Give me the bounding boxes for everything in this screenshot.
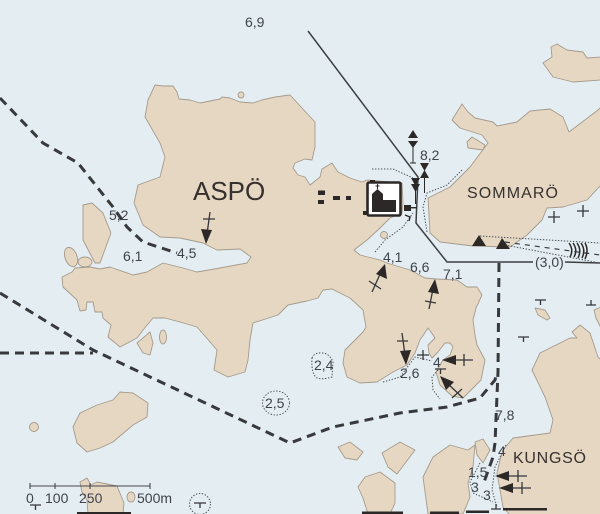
solid line east (565, 262, 600, 263)
north-south route (483, 263, 499, 485)
depth: 8,2 (420, 147, 440, 163)
rock (30, 505, 41, 510)
shoal with rock (190, 494, 210, 514)
icon: hourglass mark (420, 163, 429, 193)
scale labels: 100 (45, 490, 69, 506)
house (370, 180, 375, 182)
rock (548, 211, 560, 223)
rock (577, 205, 589, 217)
label: Aspö: ASPÖ (193, 176, 265, 206)
arrow: southeast (440, 376, 463, 398)
arrow: Aspö bay (201, 212, 215, 244)
icon: front range mark (408, 130, 418, 164)
island: Sommarö (428, 104, 600, 247)
depth: 2,5 (265, 395, 285, 411)
depth: 6,6 (410, 259, 430, 275)
islet north of Aspö (238, 92, 244, 98)
island west of Kungsö strait (423, 445, 475, 514)
solid leading line (308, 31, 533, 262)
bar (466, 510, 489, 513)
rock (417, 350, 429, 360)
icon: triangular beacons (472, 235, 510, 249)
island: Aspö (62, 85, 485, 398)
depth: 4,1 (383, 249, 403, 265)
depth: 2,4 (314, 357, 334, 373)
depth: 7,1 (443, 266, 463, 282)
depth: 4,5 (177, 245, 197, 261)
contour north of church (372, 169, 413, 178)
island: Kungsö (497, 325, 600, 514)
depth figures (109, 14, 564, 503)
icon: double down mark (411, 178, 420, 204)
label: Sommarö: SOMMARÖ (467, 184, 558, 202)
west route (0, 352, 93, 354)
scale labels: 0 (26, 490, 34, 506)
depth: 6,9 (245, 14, 265, 30)
scale bar (26, 483, 172, 506)
scale labels: 500m (137, 490, 172, 506)
arrows with crossings (201, 212, 531, 494)
contour Kungsö strait east (492, 445, 506, 507)
depth: 4 (498, 443, 506, 459)
place names (193, 176, 586, 467)
bar (503, 508, 547, 510)
scale labels (26, 490, 172, 506)
arrow: 7,1 (425, 279, 439, 309)
beacon west (472, 235, 486, 246)
rock in shoal (194, 503, 206, 508)
church silhouette (372, 189, 396, 212)
contour south cove (383, 357, 432, 382)
depth: (3,0) (535, 254, 564, 270)
bar (77, 512, 131, 514)
islet west of Aspö (83, 203, 111, 263)
dashed routes (0, 98, 499, 485)
depth: 6,1 (123, 248, 143, 264)
contour Kungsö strait west (470, 463, 493, 502)
shoal 2,5 (262, 391, 290, 415)
church cross (376, 184, 380, 189)
house (346, 196, 351, 200)
islet in strait (475, 439, 490, 463)
rock (491, 504, 501, 509)
islet (160, 330, 166, 344)
leading marks (408, 130, 429, 204)
arrow: 2,6 (397, 333, 411, 365)
sector lines from Sommarö (480, 236, 600, 263)
islet in bay (380, 232, 388, 238)
island (382, 442, 415, 474)
arrow: 4,1 (369, 264, 387, 292)
hatch arcs (569, 243, 587, 259)
contour south lobe (432, 370, 440, 399)
rock (535, 300, 546, 305)
frame (368, 182, 400, 216)
depth: 7,8 (495, 407, 515, 423)
rock symbols (30, 205, 596, 510)
scale labels: 250 (79, 490, 103, 506)
upper dotted sector (480, 236, 600, 243)
island under scale bar (80, 478, 124, 514)
islet by Sommarö (467, 137, 485, 150)
house (363, 211, 367, 215)
pier connector (410, 207, 417, 208)
island: southwest (73, 392, 148, 452)
shallow dotted contours (190, 169, 506, 514)
island (358, 472, 395, 514)
islet (78, 257, 92, 267)
lower dotted sector (505, 245, 600, 263)
rock (586, 300, 596, 305)
islet (127, 492, 135, 502)
bottom edge bars (77, 508, 547, 514)
depth: 5,2 (109, 207, 129, 223)
house (333, 196, 340, 200)
shoal 2,4 (312, 353, 333, 379)
bar (430, 512, 459, 514)
house (318, 200, 324, 204)
islet (535, 308, 550, 320)
land at east edge (594, 307, 600, 328)
scale line and ticks (30, 483, 150, 489)
beacon east (496, 238, 510, 249)
pier (404, 205, 411, 211)
buildings (318, 180, 417, 221)
arrow: Kungsö upper (495, 470, 527, 482)
arrow: east cove (442, 354, 473, 366)
contour by harbour (375, 213, 413, 252)
northwest route (0, 98, 177, 253)
bar (362, 512, 403, 514)
label: Kungsö: KUNGSÖ (513, 449, 586, 467)
depth: 4 (433, 354, 441, 370)
depth: 3 (483, 487, 491, 503)
depth: 1,5 (468, 464, 488, 480)
middle dashed sector (505, 242, 600, 255)
southern route (0, 293, 497, 443)
rock (518, 337, 529, 342)
islet (62, 246, 80, 268)
contour Sommarö side (423, 170, 462, 232)
pier hook (405, 215, 410, 221)
islet south of Aspö (137, 332, 153, 355)
islet (30, 422, 38, 432)
icon: church in framed box (368, 182, 400, 216)
rock (435, 369, 446, 374)
depth: 3 (471, 479, 479, 495)
island (338, 442, 363, 460)
depth: 2,6 (400, 365, 420, 381)
house (318, 190, 325, 195)
island northeast (543, 44, 600, 82)
arrow: Kungsö lower (499, 482, 531, 494)
